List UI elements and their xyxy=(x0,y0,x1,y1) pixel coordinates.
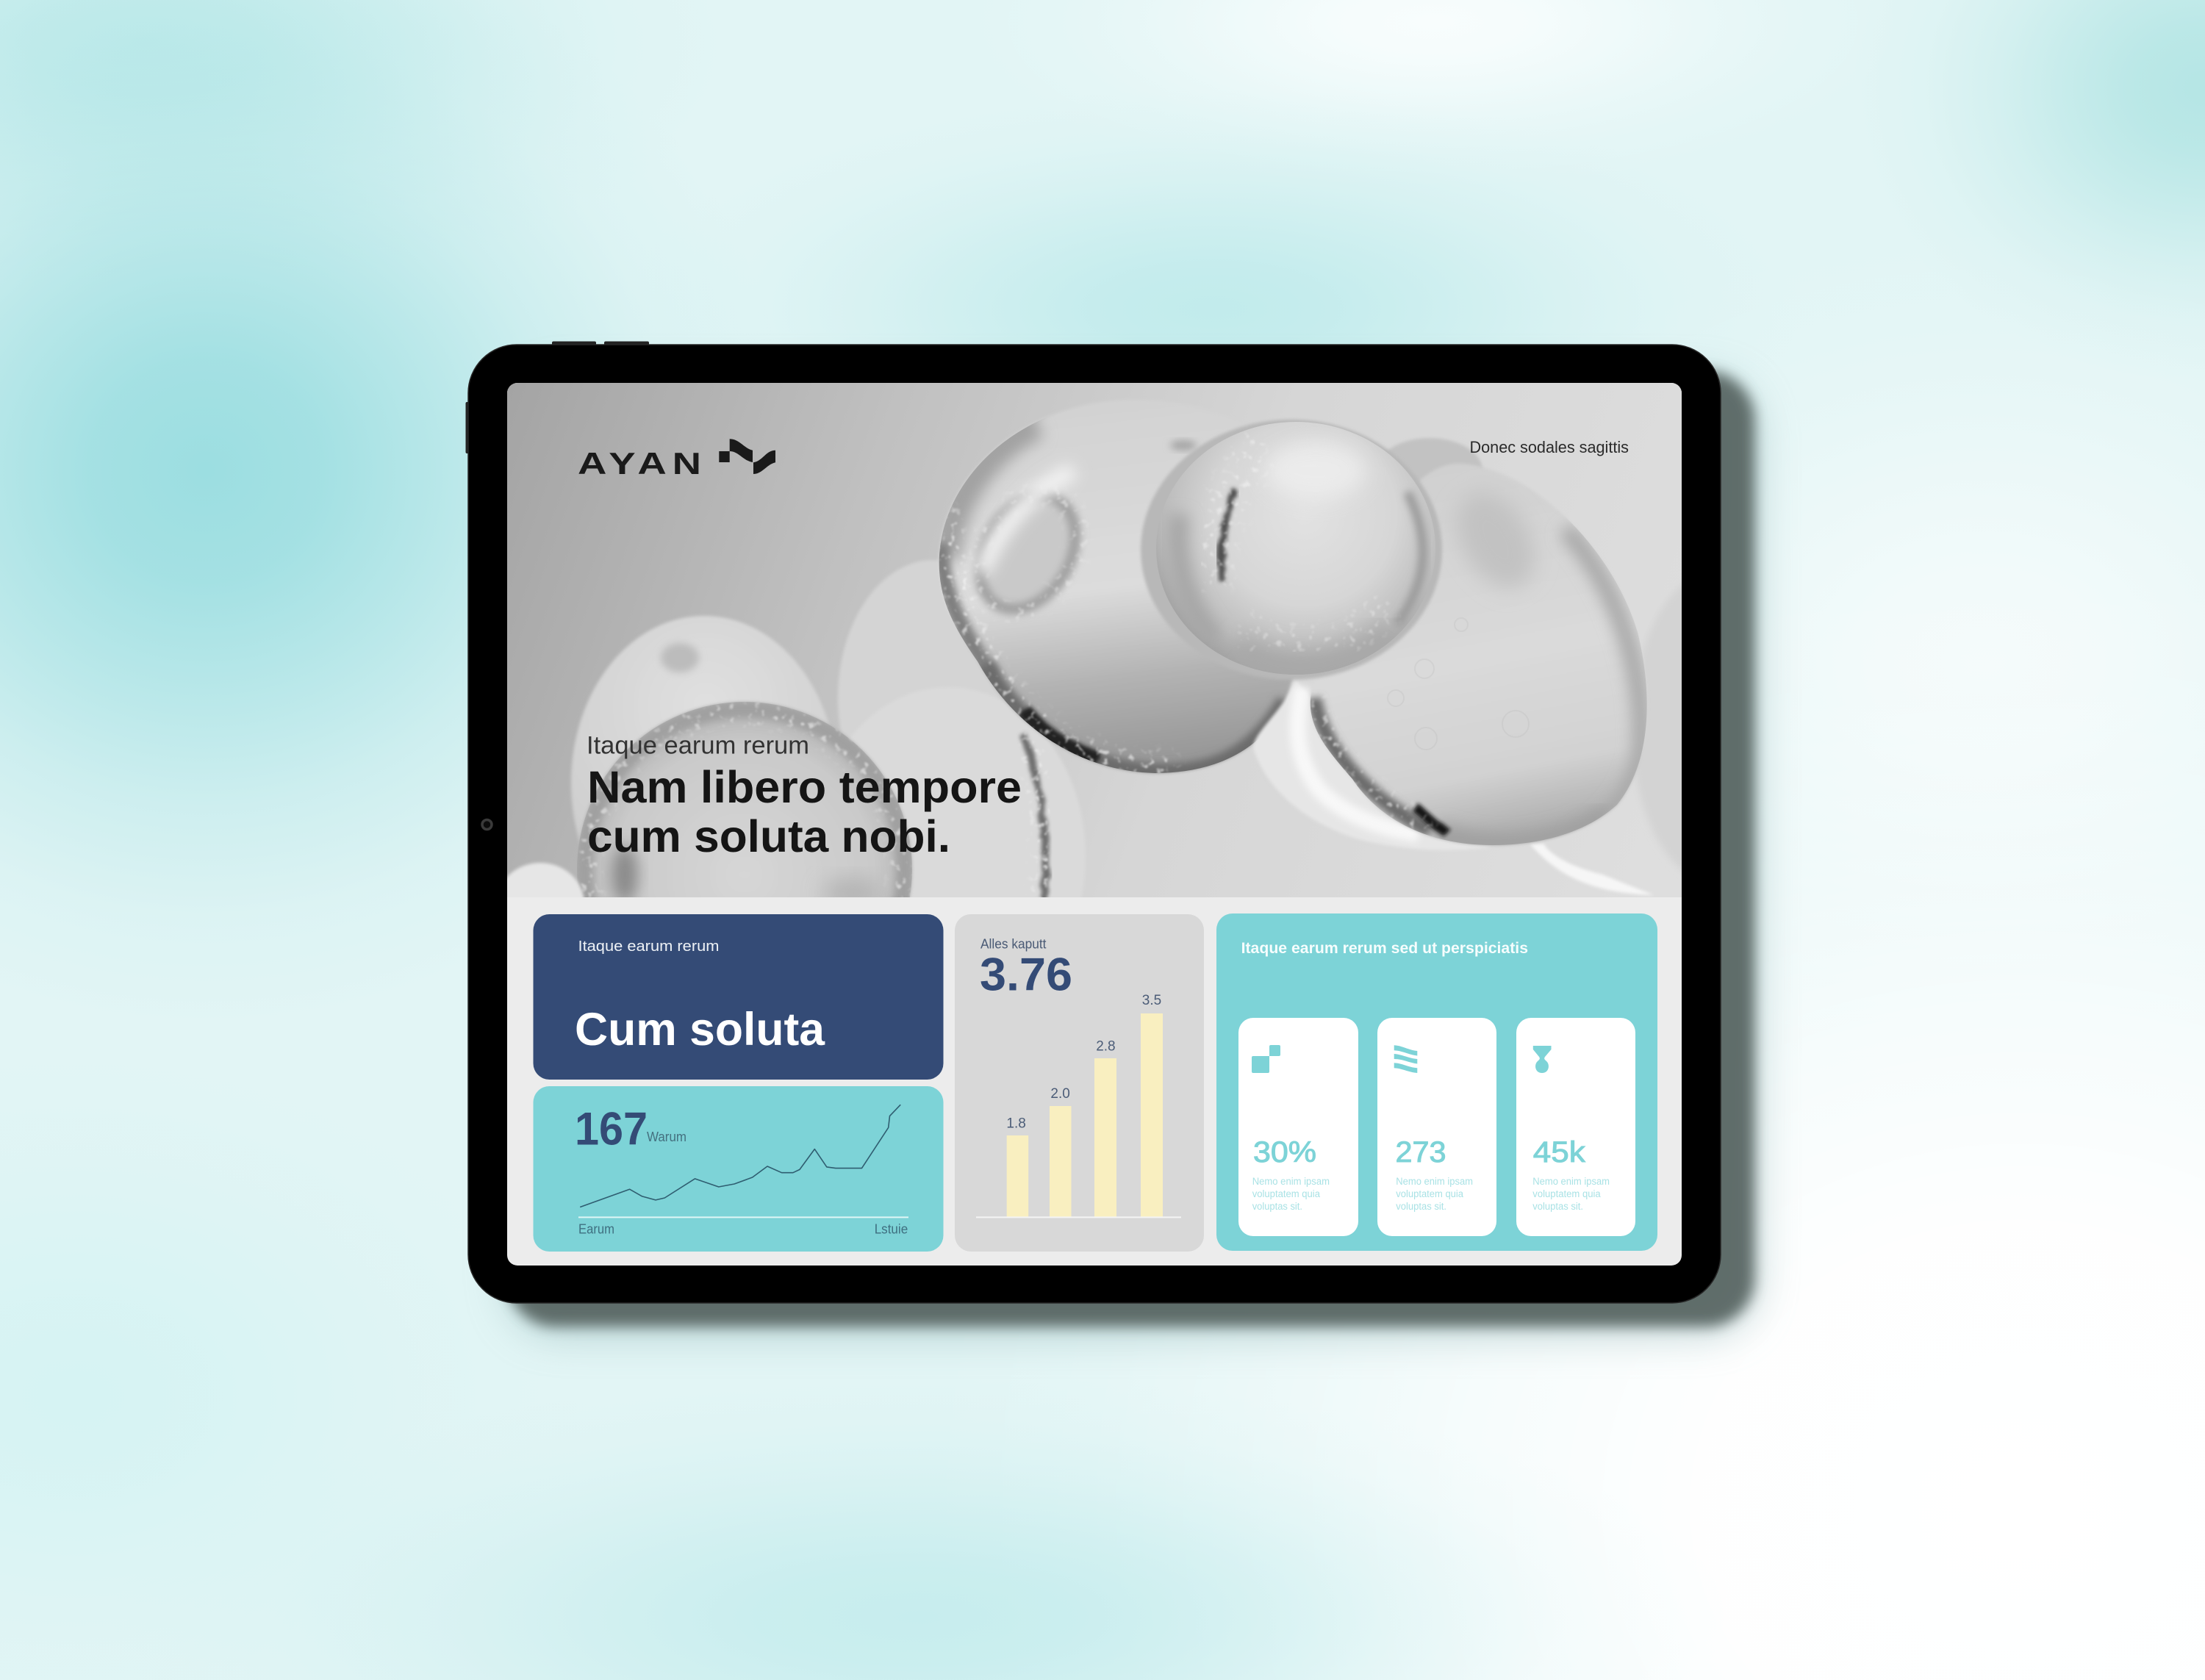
tablet drop shadow xyxy=(507,371,1757,1334)
description: voluptas sit. xyxy=(1252,1201,1302,1212)
value 273: 273 xyxy=(1395,1136,1446,1169)
logo wordmark: AYAN xyxy=(578,447,707,481)
hero title line two: cum soluta nobi. xyxy=(587,811,950,861)
hero title line one: Nam libero tempore xyxy=(587,762,1022,812)
panel: bar chart card xyxy=(955,914,1204,1252)
description xyxy=(1532,1176,1610,1212)
stat card 30% xyxy=(1238,1018,1358,1236)
camera xyxy=(482,820,492,829)
stat card 45k xyxy=(1516,1018,1635,1236)
small front sphere xyxy=(1141,420,1442,680)
description: Nemo enim ipsam xyxy=(1252,1176,1330,1187)
navy card title: Cum soluta xyxy=(575,1004,825,1055)
tablet mockup illustration xyxy=(466,341,1779,1356)
large bubble top centre xyxy=(939,400,1301,773)
metric 167: 167 xyxy=(575,1104,648,1155)
hero heading block xyxy=(587,732,1022,861)
icon: hourglass drop xyxy=(1533,1046,1551,1073)
tablet side buttons and body xyxy=(466,341,1721,1303)
bar chart: 3.5 xyxy=(1142,993,1161,1008)
panel: line chart card xyxy=(534,1086,944,1252)
bar chart: 2.0 xyxy=(1050,1086,1070,1102)
description: voluptatem quia xyxy=(1396,1188,1463,1199)
front left bubble xyxy=(577,700,913,897)
white crescent under right bubble xyxy=(1253,680,1492,850)
line chart trend xyxy=(580,1105,900,1207)
description xyxy=(1252,1176,1330,1212)
description: voluptas sit. xyxy=(1532,1201,1583,1212)
description: voluptas sit. xyxy=(1396,1201,1446,1212)
description: Nemo enim ipsam xyxy=(1532,1176,1610,1187)
logo mark xyxy=(719,439,775,474)
back left bubble xyxy=(570,614,828,839)
axis label left: Earum xyxy=(578,1222,614,1237)
lower middle bubble xyxy=(908,725,1078,897)
brand logo xyxy=(578,439,775,481)
top right caption: Donec sodales sagittis xyxy=(1470,438,1629,456)
bottom left sliver bubble xyxy=(507,861,585,897)
axis label right: Lstuie xyxy=(875,1222,908,1237)
bar chart caption: Alles kaputt xyxy=(980,936,1047,951)
bar chart: 2.8 xyxy=(1096,1039,1116,1055)
bar chart metric: 3.76 xyxy=(980,950,1072,1001)
stat card 273 xyxy=(1377,1018,1496,1236)
panel: navy title card xyxy=(534,914,944,1080)
description xyxy=(1396,1176,1473,1212)
small back bubble xyxy=(1389,438,1482,481)
panel: stats group xyxy=(1216,913,1657,1251)
metric unit: Warum xyxy=(647,1130,686,1144)
icon: three waves xyxy=(1394,1045,1417,1073)
bottom right crescent xyxy=(1530,844,1654,895)
ghost bubble far right xyxy=(1638,591,1682,866)
navy card eyebrow: Itaque earum rerum xyxy=(578,938,719,955)
description: voluptatem quia xyxy=(1532,1188,1601,1199)
large bubble right xyxy=(1311,464,1647,846)
stats heading: Itaque earum rerum sed ut perspiciatis xyxy=(1241,940,1528,957)
description: Nemo enim ipsam xyxy=(1396,1176,1473,1187)
hero eyebrow: Itaque earum rerum xyxy=(587,732,809,760)
bar chart xyxy=(976,993,1181,1217)
bar chart: 1.8 xyxy=(1006,1116,1026,1131)
value 45k: 45k xyxy=(1533,1136,1586,1169)
ghost bubble centre xyxy=(838,560,997,738)
value 30%: 30% xyxy=(1253,1136,1316,1169)
description: voluptatem quia xyxy=(1252,1188,1320,1199)
hero photo: glass bubbles in greyscale xyxy=(507,383,1682,897)
icon: stepped squares xyxy=(1252,1045,1280,1073)
screen base xyxy=(507,383,1682,1266)
